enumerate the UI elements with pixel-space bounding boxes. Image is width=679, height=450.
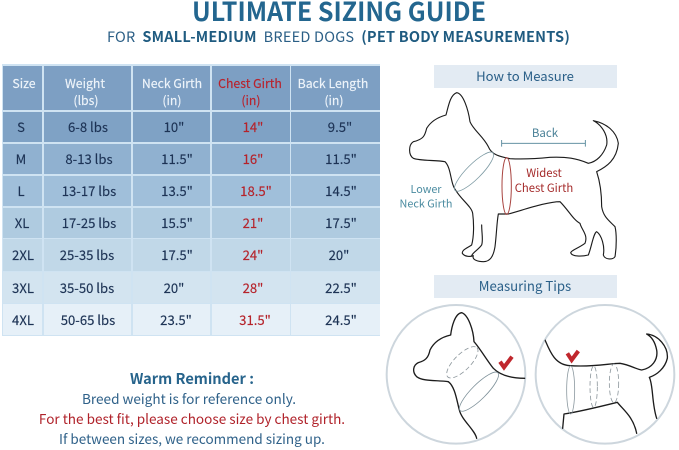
header row: (lbs): [73, 91, 99, 109]
row 4XL: [3, 304, 380, 335]
chest ellipse: [567, 366, 575, 414]
back measure line: [502, 140, 585, 147]
row M: 16": [243, 149, 263, 168]
row M: M: [16, 149, 26, 168]
check mark: [567, 351, 578, 360]
row 4XL: 50-65 lbs: [61, 310, 115, 329]
dashed upper neck ellipse: [442, 342, 483, 383]
row S: 14": [243, 117, 263, 136]
row M: 11.5": [161, 149, 193, 168]
row 4XL: 23.5": [160, 310, 192, 329]
row XL: XL: [15, 213, 29, 232]
dog head outline: [414, 313, 525, 438]
row 3XL: 28": [243, 278, 263, 297]
row 4XL: 31.5": [239, 310, 271, 329]
row 2XL: 17.5": [161, 245, 193, 264]
dog outline: [410, 93, 618, 262]
neck label: Neck Girth: [400, 196, 452, 212]
row M: [3, 144, 380, 174]
dashed rear ellipse: [609, 364, 619, 403]
reminder line 1: Breed weight is for reference only.: [82, 388, 296, 408]
row XL: 17.5": [325, 213, 357, 232]
row 3XL: 22.5": [325, 278, 357, 297]
chest label: Chest Girth: [515, 180, 573, 196]
row S: 6-8 lbs: [68, 117, 108, 136]
measuring tips banner: Measuring Tips: [479, 276, 571, 295]
row XL: 21": [243, 213, 263, 232]
warm reminder: [39, 368, 345, 448]
row L: L: [17, 181, 25, 200]
reminder heading: Warm Reminder :: [130, 368, 254, 389]
header row: Size: [12, 74, 36, 92]
row M: 11.5": [325, 149, 357, 168]
row S: S: [17, 117, 25, 136]
chest label: Widest: [526, 165, 563, 181]
check mark: [500, 357, 512, 367]
dog belly outline: [563, 402, 637, 433]
row 3XL: [3, 272, 380, 303]
header row: (in): [162, 91, 182, 109]
neck label: Lower: [410, 181, 442, 197]
row L: 14.5": [325, 181, 357, 200]
row 4XL: 4XL: [12, 310, 34, 329]
row XL: [3, 208, 380, 238]
row 2XL: 20": [329, 245, 349, 264]
neck girth ellipse: [450, 148, 498, 196]
row 2XL: 25-35 lbs: [60, 245, 114, 264]
row L: 13-17 lbs: [62, 181, 116, 200]
lower neck ellipse: [455, 368, 503, 416]
reminder line 2: For the best fit, please choose size by chest girth.: [39, 408, 345, 428]
header row: Chest Girth: [218, 74, 282, 92]
how to measure banner: [434, 65, 617, 88]
row M: 8-13 lbs: [65, 149, 113, 168]
row XL: 17-25 lbs: [62, 213, 116, 232]
row 2XL: [3, 239, 380, 271]
row S: [3, 112, 380, 142]
header row: Weight: [65, 74, 105, 92]
header row: [3, 66, 380, 110]
header row: Neck Girth: [142, 74, 202, 92]
header row: (in): [241, 91, 261, 109]
chest girth ellipse: [502, 158, 511, 214]
row 4XL: 24.5": [325, 310, 357, 329]
tip circle: neck: [387, 305, 525, 444]
dog diagram: [410, 93, 618, 262]
row 2XL: 24": [243, 245, 263, 264]
row 3XL: 35-50 lbs: [60, 278, 114, 297]
how to measure banner: How to Measure: [476, 66, 574, 85]
row S: 9.5": [328, 117, 352, 136]
header row: (in): [324, 91, 344, 109]
row L: 13.5": [161, 181, 193, 200]
subtitle: FOR SMALL-MEDIUM BREED DOGS (PET BODY MEASUREMENTS): [107, 26, 570, 47]
row L: 18.5": [240, 181, 272, 200]
row 3XL: 3XL: [12, 278, 34, 297]
measuring tips banner: [434, 275, 617, 298]
row 3XL: 20": [164, 278, 184, 297]
dashed middle ellipse: [590, 366, 597, 407]
front leg inner line: [472, 225, 482, 256]
size table: [2, 64, 380, 336]
header row: Back Length: [298, 74, 368, 92]
row S: 10": [164, 117, 184, 136]
back label: Back: [532, 125, 559, 141]
dog body outline: [545, 334, 667, 418]
row XL: 15.5": [161, 213, 193, 232]
row L: [3, 176, 380, 206]
tip circle: chest: [536, 305, 674, 444]
row 2XL: 2XL: [12, 245, 34, 264]
reminder line 3: If between sizes, we recommend sizing up.: [59, 428, 325, 448]
